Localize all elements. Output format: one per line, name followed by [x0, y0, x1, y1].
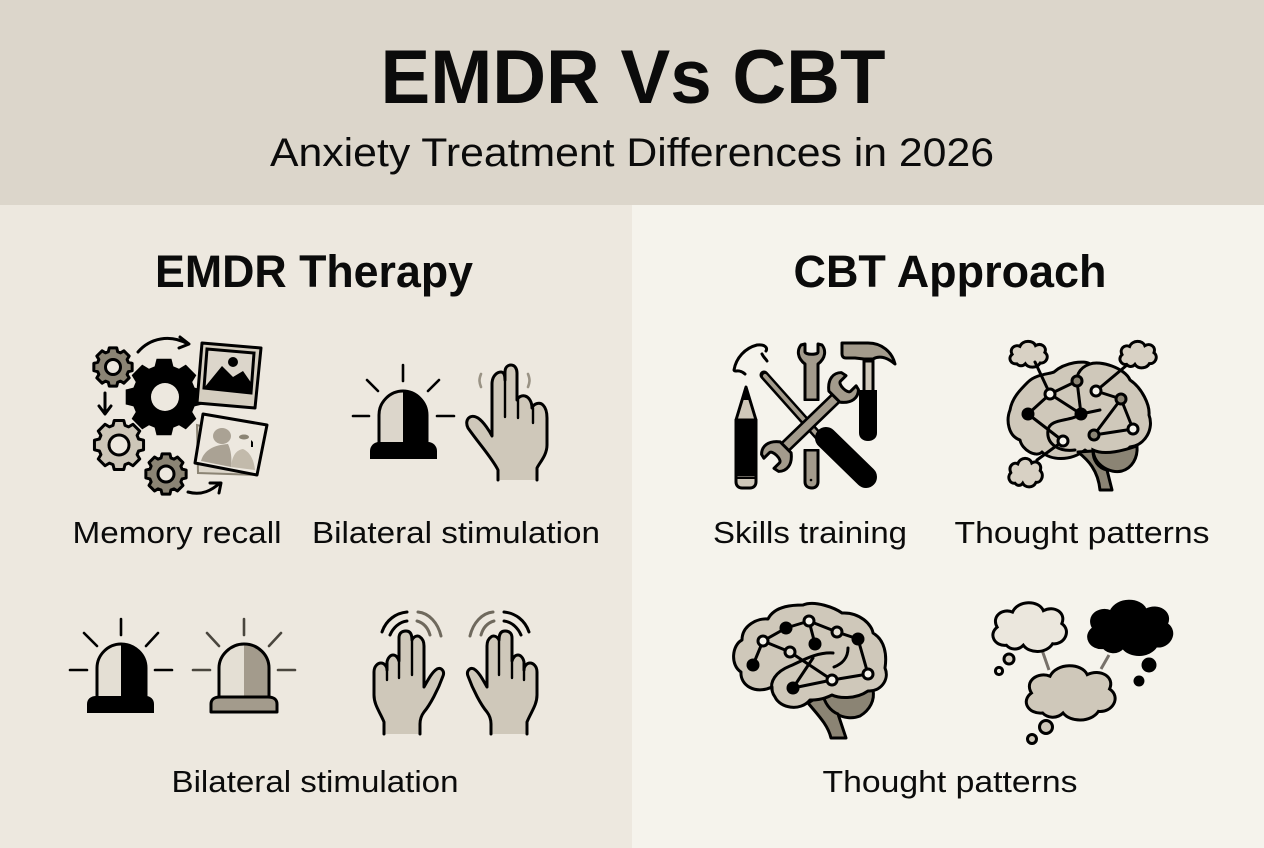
- icon: gears and memory photos: [94, 337, 267, 494]
- label: Memory recall: Memory recall: [72, 515, 282, 550]
- icon: thought clouds: [993, 601, 1172, 744]
- label: Thought patterns, bottom: Thought patterns: [822, 764, 1078, 799]
- icon: brain network with clouds: [1008, 341, 1156, 490]
- icon: tools: [734, 343, 895, 488]
- header band: [0, 0, 1264, 205]
- icon: black siren: [70, 619, 172, 713]
- icon: right hand with waves: [467, 612, 537, 734]
- arrow: down: [99, 393, 111, 414]
- arrow: top curve: [138, 337, 189, 352]
- label: Thought patterns, top: Thought patterns: [954, 515, 1210, 550]
- icon: hand with two raised fingers: [467, 365, 547, 480]
- icon: siren with black half: [353, 365, 454, 459]
- subtitle: Anxiety Treatment Differences in 2026: [270, 131, 994, 175]
- arrow: bottom curve: [188, 483, 221, 493]
- panel: EMDR therapy: [0, 205, 632, 848]
- icon: left hand with waves: [374, 612, 444, 734]
- label: Skills training: Skills training: [713, 515, 907, 550]
- label: Bilateral stimulation, top: Bilateral stimulation: [312, 515, 600, 550]
- heading: EMDR Therapy: EMDR Therapy: [155, 246, 473, 297]
- title: EMDR Vs CBT: [380, 35, 886, 120]
- panel: CBT approach: [632, 205, 1264, 848]
- icon: grey siren: [193, 619, 295, 712]
- icon: brain network: [734, 603, 886, 738]
- label: Bilateral stimulation, bottom: Bilateral stimulation: [172, 764, 458, 799]
- heading: CBT Approach: CBT Approach: [794, 246, 1106, 297]
